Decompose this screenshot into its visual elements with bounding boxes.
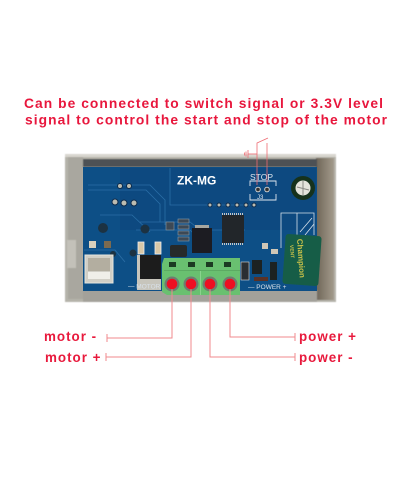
capacitor (291, 176, 315, 200)
main chip (222, 214, 244, 244)
power board label: — POWER + (248, 284, 287, 291)
dark vias (98, 223, 150, 257)
small diode (89, 241, 187, 257)
stop label: STOP (250, 172, 273, 182)
stop label: J3 (257, 195, 264, 201)
voltage regulator (192, 225, 212, 253)
power section chips (241, 243, 278, 281)
stop label (250, 172, 276, 201)
label: power minus: power - (299, 350, 354, 365)
switch wiring (244, 138, 268, 185)
terminal markers (167, 279, 235, 289)
label: motor plus: motor + (45, 350, 101, 365)
green relay: Champion (295, 239, 307, 278)
title: signal to control the start and stop of the motor (25, 112, 388, 128)
motor board label: — MOTOR — (128, 284, 169, 290)
connector lines (106, 288, 295, 361)
green relay (282, 234, 322, 286)
device enclosure (65, 154, 336, 302)
label: power plus: power + (299, 329, 357, 344)
green relay: VENT (288, 245, 295, 258)
terminal block (162, 258, 240, 295)
title (24, 96, 388, 128)
power transistor (137, 242, 161, 290)
circuit board (83, 167, 322, 291)
label: motor minus: motor - (44, 329, 97, 344)
metal inductor pad (85, 255, 113, 283)
board traces (84, 168, 250, 262)
outlined silk area (281, 213, 314, 248)
model label: ZK-MG (177, 174, 216, 188)
small resistor stack (166, 219, 189, 241)
solder pads (112, 184, 256, 207)
title: Can be connected to switch signal or 3.3V level (24, 96, 383, 111)
